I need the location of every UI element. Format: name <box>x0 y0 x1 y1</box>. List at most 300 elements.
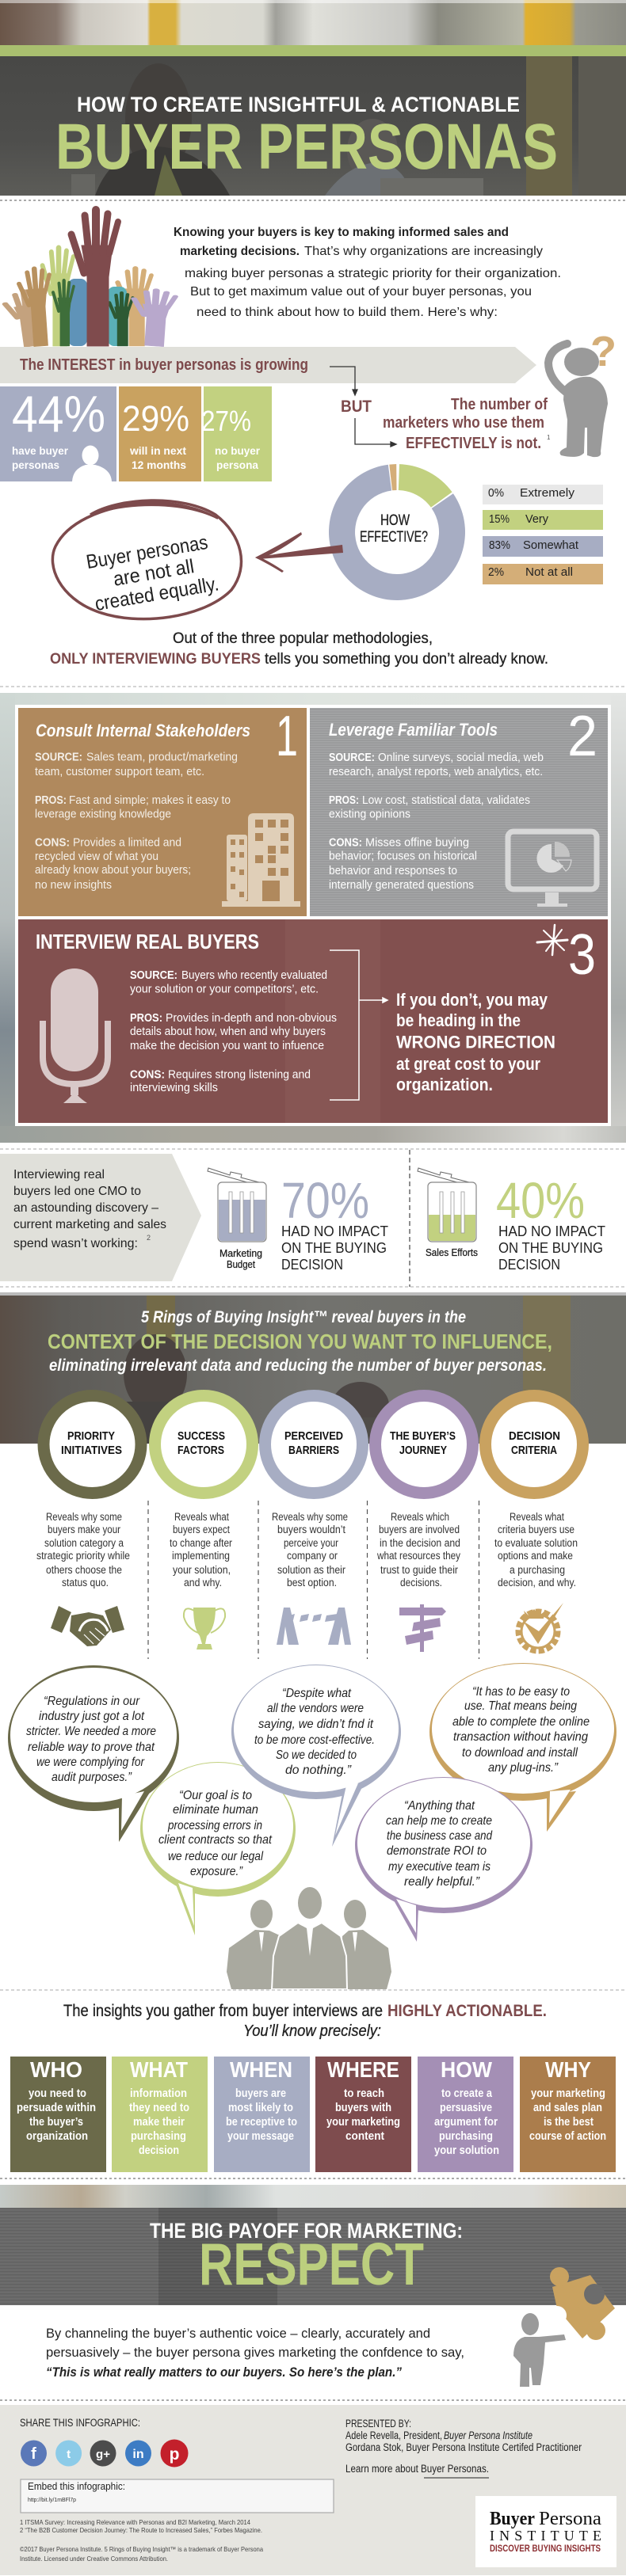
text: authentic voice: persuasively – the buyer persona gives marketing the confdence to say, <box>46 2345 464 2360</box>
ring: success factors: FACTORS <box>177 1444 224 1457</box>
card: why: WHY <box>545 2057 591 2082</box>
text: decision criteria description: to evaluate solution <box>494 1537 578 1549</box>
intro text: But to get maximum value out of your buyer personas, you <box>190 285 532 299</box>
text: decision criteria description: a purchasing <box>510 1564 565 1576</box>
ring: priority initiatives: PRIORITY <box>67 1429 115 1443</box>
stat: 70 percent: HAD NO IMPACT <box>281 1223 388 1239</box>
text: leverage details: SOURCE: <box>329 751 375 764</box>
logo: buyer persona institute: Buyer <box>490 2509 535 2529</box>
callout: marketers effectively: 1 <box>547 434 551 441</box>
arrow: brush from donut to callout <box>255 532 343 573</box>
callout: astounding discovery: current marketing and sales <box>13 1218 166 1231</box>
card: why: course of action <box>529 2130 606 2143</box>
card: who: WHO <box>30 2057 82 2082</box>
text: only interviewing buyers: ONLY INTERVIEWING BUYERS <box>50 651 261 668</box>
quote: our goal: we reduce our legal <box>168 1850 263 1863</box>
icons: social media: t <box>67 2448 71 2461</box>
card: why <box>520 2057 616 2172</box>
text: consult details: already know about your buyers; <box>35 864 191 877</box>
text: authentic voice: By channeling the buyer’s authentic voice – clearly, accurately and <box>46 2326 430 2341</box>
quote: anything: the business case and <box>387 1829 493 1843</box>
stat: 29%: 12 months <box>132 459 186 471</box>
ring: priority initiatives: INITIATIVES <box>61 1444 122 1457</box>
text: priority initiatives description <box>36 1511 130 1589</box>
quote: despite: do nothing.” <box>285 1764 352 1777</box>
text: buyer's journey description <box>376 1511 460 1589</box>
intro text: Knowing your buyers is key to making informed sales and <box>174 226 509 239</box>
illustration: raised hands <box>4 210 176 349</box>
logo: buyer persona institute: DISCOVER BUYING INSIGHTS <box>490 2543 601 2554</box>
panel: interview real buyers <box>18 919 608 1123</box>
card: what: make their <box>133 2116 185 2129</box>
text: buyer's journey description: buyers are involved <box>379 1524 460 1535</box>
text: consult details: PROS: <box>35 794 67 807</box>
text: buyer's journey description: in the decision and <box>380 1537 460 1549</box>
text: presented by <box>345 2418 582 2479</box>
text: perceived barriers description <box>272 1511 348 1589</box>
text: consult details: team, customer support team, etc. <box>35 766 204 778</box>
text: priority initiatives description: solution category a <box>44 1537 124 1549</box>
icons: social media: g+ <box>96 2448 110 2461</box>
text: buyer's journey description: what resources they <box>376 1550 460 1562</box>
ring: perceived barriers <box>265 1395 363 1493</box>
donut chart: how effective <box>329 464 465 600</box>
ring: success factors: SUCCESS <box>177 1429 225 1443</box>
card: how: HOW <box>441 2057 493 2082</box>
ring: decision criteria <box>485 1395 583 1493</box>
callout: wrong direction: be heading in the <box>396 1010 521 1030</box>
text: buyer's journey description: decisions. <box>400 1577 442 1589</box>
heading: respect: RESPECT <box>199 2231 424 2297</box>
text: priority initiatives description: buyers make your <box>48 1524 120 1535</box>
callout: marketers effectively <box>341 396 551 452</box>
text: interview details: PROS: <box>130 1012 162 1025</box>
text: consult details: CONS: <box>35 836 70 849</box>
text: success factors description: your solution, <box>173 1564 231 1576</box>
icon: person scratching head <box>548 328 616 457</box>
callout: buyer personas not created equally: created equally. <box>94 573 220 615</box>
text: leverage details: existing opinions <box>329 808 410 820</box>
stat: 40 percent: DECISION <box>498 1257 560 1273</box>
card: how <box>418 2057 513 2172</box>
quote: easy to use: to download and install <box>462 1746 578 1760</box>
legend: effectiveness: 0% <box>488 486 504 500</box>
number 1: 1 <box>276 705 298 768</box>
text: perceived barriers description: Reveals why some <box>272 1511 348 1523</box>
embed box: Embed this infographic: <box>28 2480 125 2492</box>
quote: regulations: stricter. We needed a more <box>26 1725 156 1738</box>
logo: buyer persona institute: Persona <box>539 2509 601 2529</box>
callout: astounding discovery: buyers led one CMO to <box>13 1185 141 1198</box>
card: how: your solution <box>434 2144 499 2157</box>
heading: interview: INTERVIEW REAL BUYERS <box>36 930 259 953</box>
text: only interviewing buyers <box>50 630 548 668</box>
quote: anything: “Anything that <box>404 1799 475 1813</box>
text: only interviewing buyers: tells you something you don’t already know. <box>265 651 548 668</box>
text: consult details: leverage existing knowledge <box>35 808 171 820</box>
footnotes <box>20 2518 263 2563</box>
footnotes: 1 ITSMA Survey: Increasing Relevance with Personas and B2I Marketing, March 2014 <box>20 2518 250 2526</box>
quote: regulations: “Regulations in our <box>44 1695 140 1708</box>
card: what: purchasing <box>131 2130 186 2143</box>
donut chart: how effective: EFFECTIVE? <box>360 529 428 546</box>
quote: regulations <box>26 1695 156 1784</box>
callout: wrong direction: If you don’t, you may <box>396 990 548 1010</box>
text: presented by: PRESENTED BY: <box>345 2418 411 2430</box>
icon: buildings <box>222 813 300 907</box>
text: presented by: Gordana Stok, Buyer Persona Institute Certifed Practitioner <box>345 2441 582 2453</box>
text: interview details: CONS: <box>130 1069 165 1082</box>
text: decision criteria description: criteria buyers use <box>498 1524 574 1535</box>
quote: easy to use: “It has to be easy to <box>472 1685 570 1699</box>
card: who: you need to <box>29 2087 86 2100</box>
ring: the buyer's journey: THE BUYER’S <box>390 1429 456 1443</box>
footnotes: ©2017 Buyer Persona Institute. 5 Rings of Buying Insight™ is a trademark of Buyer Persona <box>20 2545 263 2553</box>
legend: effectiveness: 15% <box>489 512 510 526</box>
callout: astounding discovery: Interviewing real <box>13 1168 105 1181</box>
panel: footer <box>0 2405 626 2575</box>
icon: bin sales efforts <box>418 1168 478 1258</box>
quote: regulations: industry just got a lot <box>39 1710 144 1723</box>
arrow: but connector <box>330 367 396 447</box>
icon: bin sales efforts: Sales Efforts <box>426 1246 478 1258</box>
card: when: your message <box>227 2130 294 2143</box>
text: consult details: Provides a limited and <box>73 836 181 849</box>
stat: 70 percent <box>281 1172 388 1273</box>
illustration: three business people <box>227 1887 391 1989</box>
embed box <box>21 2479 334 2513</box>
quote: regulations: audit purposes.” <box>52 1771 132 1784</box>
speech bubble: green <box>140 1762 296 1935</box>
ring: perceived barriers: PERCEIVED <box>284 1429 343 1443</box>
heading: respect <box>150 2219 463 2297</box>
panel: leverage familiar tools <box>310 705 608 916</box>
speech bubble: purple <box>355 1777 532 1942</box>
quote: our goal: processing errors in <box>167 1819 262 1832</box>
text: decision criteria description: Reveals what <box>510 1511 564 1523</box>
panel: methodologies background <box>0 693 626 1143</box>
card: who <box>10 2057 106 2172</box>
card: where: buyers with <box>335 2102 391 2114</box>
stat: 29%: will in next <box>129 444 186 457</box>
heading: five rings <box>48 1308 552 1375</box>
banner arrow: interest growing <box>0 347 536 383</box>
card: where: WHERE <box>327 2057 399 2082</box>
ring: perceived barriers: BARRIERS <box>288 1444 339 1457</box>
card: where: your marketing <box>326 2116 400 2129</box>
text: success factors description: Reveals what <box>174 1511 229 1523</box>
panel: consult internal stakeholders <box>18 705 307 916</box>
quote: anything: can help me to create <box>386 1814 492 1828</box>
text: leverage details: research, analyst reports, web analytics, etc. <box>329 766 543 778</box>
text: authentic voice: “This is what really matters to our buyers. So here’s the plan.” <box>46 2365 402 2380</box>
text: consult details: SOURCE: <box>35 751 82 763</box>
stat: 40 percent <box>496 1172 605 1273</box>
text: leverage details: PROS: <box>329 794 359 807</box>
intro text: That’s why organizations are increasingly <box>304 245 543 258</box>
card: what: they need to <box>129 2102 189 2114</box>
header dark band with photo <box>0 56 626 196</box>
icon: bin marketing budget: Budget <box>227 1258 255 1270</box>
quote: despite: So we decided to <box>276 1748 357 1762</box>
icon: handshake <box>51 1606 124 1646</box>
text: leverage details: CONS: <box>329 836 362 849</box>
callout: astounding discovery <box>0 1154 201 1281</box>
text: perceived barriers description: solution as their <box>277 1564 345 1576</box>
text: consult details: recycled view of what you <box>35 850 158 863</box>
quote: anything <box>386 1799 493 1889</box>
card: who: organization <box>26 2130 88 2143</box>
text: decision criteria description: decision, and why. <box>498 1577 576 1589</box>
legend: effectiveness: Very <box>525 512 548 526</box>
footnotes: 2 “The B2B Customer Decision Journey: The Route to Increased Sales,” Forbes Magazine. <box>20 2526 262 2534</box>
heading: leverage: Leverage Familiar Tools <box>329 720 498 740</box>
icon: signpost <box>399 1604 446 1652</box>
text: presented by: Learn more about Buyer Personas. <box>345 2463 489 2475</box>
header photo strip <box>0 0 626 45</box>
stat: 40 percent: 40% <box>496 1172 585 1229</box>
text: interview details: make the decision you want to infuence <box>130 1040 324 1052</box>
heading: highly actionable: The insights you gather from buyer interviews are <box>63 2002 383 2020</box>
heading: consult: Consult Internal Stakeholders <box>36 721 250 740</box>
ring: priority initiatives <box>44 1395 141 1493</box>
ring: decision criteria: CRITERIA <box>511 1444 557 1457</box>
stat: 70 percent: 70% <box>281 1172 369 1229</box>
text: consult details <box>35 751 238 892</box>
card: who: persuade within <box>17 2102 96 2114</box>
callout: wrong direction <box>396 990 555 1094</box>
callout: marketers effectively: marketers who use them <box>383 414 544 432</box>
text: consult details: Fast and simple; makes it easy to <box>69 794 231 807</box>
icon: puzzle piece and person <box>513 2267 615 2387</box>
legend: effectiveness <box>483 485 603 584</box>
logo: buyer persona institute <box>475 2496 616 2567</box>
ring: decision criteria: DECISION <box>509 1429 560 1443</box>
card: when: most likely to <box>228 2102 293 2114</box>
card: how: persuasive <box>440 2102 492 2114</box>
quote: regulations: reliable way to prove that <box>28 1741 155 1754</box>
card: what: information <box>130 2087 187 2100</box>
text: success factors description <box>170 1511 232 1589</box>
quote: our goal: eliminate human <box>173 1803 258 1817</box>
ring: the buyer's journey <box>376 1395 472 1493</box>
card: when: WHEN <box>230 2057 292 2082</box>
text: success factors description: and why. <box>184 1577 222 1589</box>
stat: 29%: 29% <box>122 398 189 439</box>
text: interview details: Provides in-depth and non-obvious <box>166 1012 337 1025</box>
green title band <box>0 45 626 56</box>
callout: buyer personas not created equally <box>52 500 241 619</box>
icon: trophy <box>184 1608 225 1649</box>
text: leverage details: behavior and responses to <box>329 865 457 877</box>
stat: 44% <box>0 385 116 481</box>
card: how: to create a <box>441 2087 493 2100</box>
text: perceived barriers description: perceive your <box>284 1537 338 1549</box>
panel: five rings photo background <box>0 1292 626 1444</box>
stat: 27% <box>201 386 272 481</box>
icon: badge with check <box>519 1603 563 1650</box>
embed box: http://bit.ly/1mBFl7p <box>28 2498 76 2503</box>
card: when: be receptive to <box>226 2116 297 2129</box>
quote: anything: really helpful.” <box>404 1875 480 1889</box>
banner arrow: interest growing: The INTEREST in buyer personas is growing <box>20 356 308 374</box>
number 2: 2 <box>567 705 597 768</box>
icons: social media <box>21 2439 189 2468</box>
card: when <box>214 2057 310 2172</box>
quote: despite: all the vendors were <box>267 1702 364 1715</box>
card: why: your marketing <box>531 2087 605 2100</box>
stat: 27%: 27% <box>201 405 251 437</box>
stat: 44%: have buyer <box>12 444 69 457</box>
text: consult details: no new insights <box>35 879 112 892</box>
heading: respect: THE BIG PAYOFF FOR MARKETING: <box>150 2219 463 2243</box>
callout: astounding discovery: 2 <box>147 1234 151 1242</box>
card: what <box>112 2057 208 2172</box>
stat: 44%: 44% <box>12 385 105 443</box>
text: leverage details <box>329 751 544 892</box>
speech bubble: tan <box>429 1663 616 1832</box>
icon: person scratching head: ? <box>590 328 616 375</box>
intro text: making buyer personas a strategic priority for their organization. <box>185 267 561 280</box>
quote: our goal <box>158 1789 272 1878</box>
icon: monitor with pie <box>508 831 597 907</box>
quote: despite: “Despite what <box>282 1687 351 1700</box>
heading: highly actionable <box>63 2002 547 2040</box>
legend: effectiveness: Extremely <box>520 486 575 500</box>
callout: buyer personas not created equally: are not all <box>112 555 196 591</box>
heading: five rings: eliminating irrelevant data and reducing the number of buyer personas. <box>49 1356 547 1375</box>
text: priority initiatives description: Reveals why some <box>46 1511 122 1523</box>
stat: 44%: personas <box>12 459 59 471</box>
icons: social media: p <box>170 2445 179 2464</box>
card: when: buyers are <box>235 2087 286 2100</box>
intro text: marketing decisions. <box>180 245 300 258</box>
stat: 70 percent: ON THE BUYING <box>281 1240 387 1256</box>
quote: easy to use: able to complete the online <box>452 1715 590 1729</box>
text: interview details: SOURCE: <box>130 969 177 982</box>
arrow: bracket to conclusion <box>330 950 387 1100</box>
text: leverage details: Low cost, statistical data, validates <box>362 794 530 807</box>
speech bubble: olive <box>8 1665 179 1842</box>
number: star 3 <box>537 923 596 987</box>
text: success factors description: to change after <box>170 1537 232 1549</box>
stat: 40 percent: HAD NO IMPACT <box>498 1223 605 1239</box>
legend: effectiveness: 83% <box>489 538 510 552</box>
icons: social media: in <box>132 2448 144 2461</box>
text: leverage details: behavior; focuses on historical <box>329 850 477 863</box>
callout: astounding discovery: an astounding discovery – <box>13 1201 158 1215</box>
quote: our goal: exposure.” <box>190 1865 243 1878</box>
icons: social media: f <box>31 2445 36 2463</box>
text: perceived barriers description: best option. <box>287 1577 337 1589</box>
text: only interviewing buyers: Out of the three popular methodologies, <box>173 630 433 647</box>
icon: bin marketing budget <box>208 1168 266 1270</box>
donut chart: how effective: HOW <box>380 512 410 529</box>
icon: microphone <box>43 968 108 1103</box>
text: perceived barriers description: company or <box>287 1550 338 1562</box>
panel: big payoff <box>0 2185 626 2305</box>
text: priority initiatives description: strategic priority while <box>36 1550 130 1562</box>
text: interview details: interviewing skills <box>130 1082 218 1094</box>
quote: easy to use <box>452 1685 590 1775</box>
stat: 70 percent: DECISION <box>281 1257 343 1273</box>
quote: anything: demonstrate ROI to <box>387 1844 487 1858</box>
quote: our goal: client contracts so that <box>158 1833 272 1847</box>
quote: despite: to be more cost-effective. <box>254 1733 375 1747</box>
text: success factors description: implementing <box>172 1550 230 1562</box>
text: authentic voice <box>46 2326 464 2380</box>
text: interview details: your solution or your competitors’, etc. <box>130 984 319 996</box>
text: consult details: Sales team, product/marketing <box>86 751 238 763</box>
heading: highly actionable: You’ll know precisely: <box>243 2022 381 2040</box>
text: decision criteria description: options and make <box>498 1550 573 1562</box>
card: why: is the best <box>544 2116 594 2129</box>
legend: effectiveness: Somewhat <box>523 538 579 552</box>
text: interview details <box>130 969 337 1094</box>
legend: effectiveness: 2% <box>488 565 504 579</box>
ring: the buyer's journey: JOURNEY <box>399 1444 447 1457</box>
card: where: content <box>345 2130 384 2143</box>
quote: despite <box>254 1687 375 1777</box>
speech bubble: blue <box>231 1665 401 1847</box>
text: leverage details: internally generated questions <box>329 879 474 892</box>
text: decision criteria description <box>494 1511 578 1589</box>
card: where: to reach <box>344 2087 384 2100</box>
callout: buyer personas not created equally: Buyer personas <box>85 531 209 573</box>
legend: effectiveness: Not at all <box>525 565 573 579</box>
card: what: decision <box>139 2144 179 2157</box>
quote: our goal: “Our goal is to <box>179 1789 252 1802</box>
callout: wrong direction: at great cost to your <box>396 1054 540 1074</box>
heading: highly actionable: HIGHLY ACTIONABLE. <box>387 2002 547 2020</box>
quote: easy to use: use. That means being <box>464 1699 577 1713</box>
title: HOW TO CREATE INSIGHTFUL & ACTIONABLE <box>77 93 520 116</box>
icon: barricade <box>277 1608 351 1645</box>
text: interview details: details about how, when and why buyers <box>130 1025 326 1038</box>
quote: regulations: we were complying for <box>36 1756 145 1769</box>
callout: marketers effectively: BUT <box>341 398 372 416</box>
card: where <box>315 2057 411 2172</box>
text: perceived barriers description: buyers wouldn’t <box>277 1524 345 1535</box>
quote: anything: my executive team is <box>388 1860 490 1874</box>
footnotes: Institute. Licensed under Creative Commons Attribution. <box>20 2555 168 2563</box>
text: presented by: Buyer Persona Institute <box>444 2430 532 2441</box>
text: leverage details: Misses offine buying <box>365 836 469 849</box>
ring: success factors <box>155 1395 252 1493</box>
stat: 27%: no buyer <box>215 444 261 457</box>
card: why: and sales plan <box>533 2102 602 2114</box>
quote: easy to use: transaction without having <box>453 1730 588 1744</box>
text: presented by: Adele Revella, President, <box>345 2430 442 2441</box>
text: interview details: Requires strong listening and <box>168 1069 311 1082</box>
text: buyer's journey description: Reveals which <box>391 1511 449 1523</box>
logo: buyer persona institute: INSTITUTE <box>490 2528 601 2544</box>
icon: bin marketing budget: Marketing <box>219 1247 262 1259</box>
intro text <box>174 226 561 319</box>
text: priority initiatives description: others choose the <box>46 1564 122 1576</box>
card: how: argument for <box>434 2116 498 2129</box>
stat: 40 percent: ON THE BUYING <box>498 1240 603 1256</box>
text: leverage details: Online surveys, social media, web <box>378 751 544 764</box>
text: interview details: Buyers who recently evaluated <box>181 969 327 982</box>
callout: astounding discovery: spend wasn’t working: <box>13 1237 138 1250</box>
stat: 27%: persona <box>216 459 258 471</box>
quote: easy to use: any plug-ins.” <box>488 1761 559 1775</box>
stat: 29% <box>119 386 201 481</box>
callout: marketers effectively: EFFECTIVELY is not. <box>406 435 541 452</box>
card: who: the buyer’s <box>29 2116 83 2129</box>
text: success factors description: buyers expect <box>173 1524 230 1535</box>
